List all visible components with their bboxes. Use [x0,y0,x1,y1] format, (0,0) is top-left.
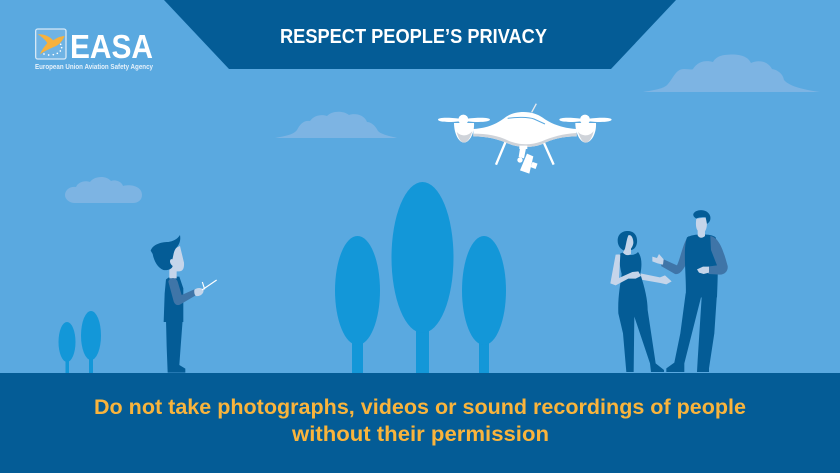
man legs [666,293,717,372]
trees [58,182,506,373]
caption: Do not take photographs, videos or sound recordings of people [94,395,746,419]
pilot figure [151,235,217,373]
woman neck and face [623,235,633,255]
pilot arm [168,278,196,305]
tree: small left [58,322,76,373]
banner title: RESPECT PEOPLE’S PRIVACY [280,26,548,48]
man [652,210,728,372]
man left sleeve [661,236,692,274]
woman left arm [610,254,641,285]
pilot hair [151,235,180,270]
caption: without their permission [291,422,549,446]
drone [438,104,612,174]
woman dress [618,252,664,372]
remote control [202,280,217,290]
left rotor [438,115,490,143]
man torso [685,234,718,297]
caption [94,395,746,446]
woman hair [618,231,637,251]
tree: centre [392,182,454,373]
man hands [652,254,709,274]
woman right arm [640,273,672,284]
man neck and face [696,217,707,238]
man right sleeve [708,236,728,275]
logo icon: bird [36,29,66,59]
drone body [473,112,577,147]
pilot neck and face [169,246,184,278]
ground band [0,373,840,473]
tree: small right [81,311,101,373]
EASA logo [35,28,154,71]
tree: left [335,236,380,373]
cloud: left [65,177,142,203]
pilot legs [166,320,185,373]
camera gimbal [517,146,538,174]
cloud: right [643,54,820,92]
pilot hand [194,288,204,296]
cloud: middle [275,112,397,138]
right rotor [559,115,612,143]
logo subtitle: European Union Aviation Safety Agency [35,62,154,71]
woman [610,231,672,372]
landing legs [496,140,554,165]
tree: right [462,236,506,373]
couple figures [610,210,728,372]
man hair [693,210,710,224]
antenna [532,104,536,112]
top banner [164,0,676,69]
logo wordmark: EASA [70,28,153,65]
pilot torso [164,277,183,322]
